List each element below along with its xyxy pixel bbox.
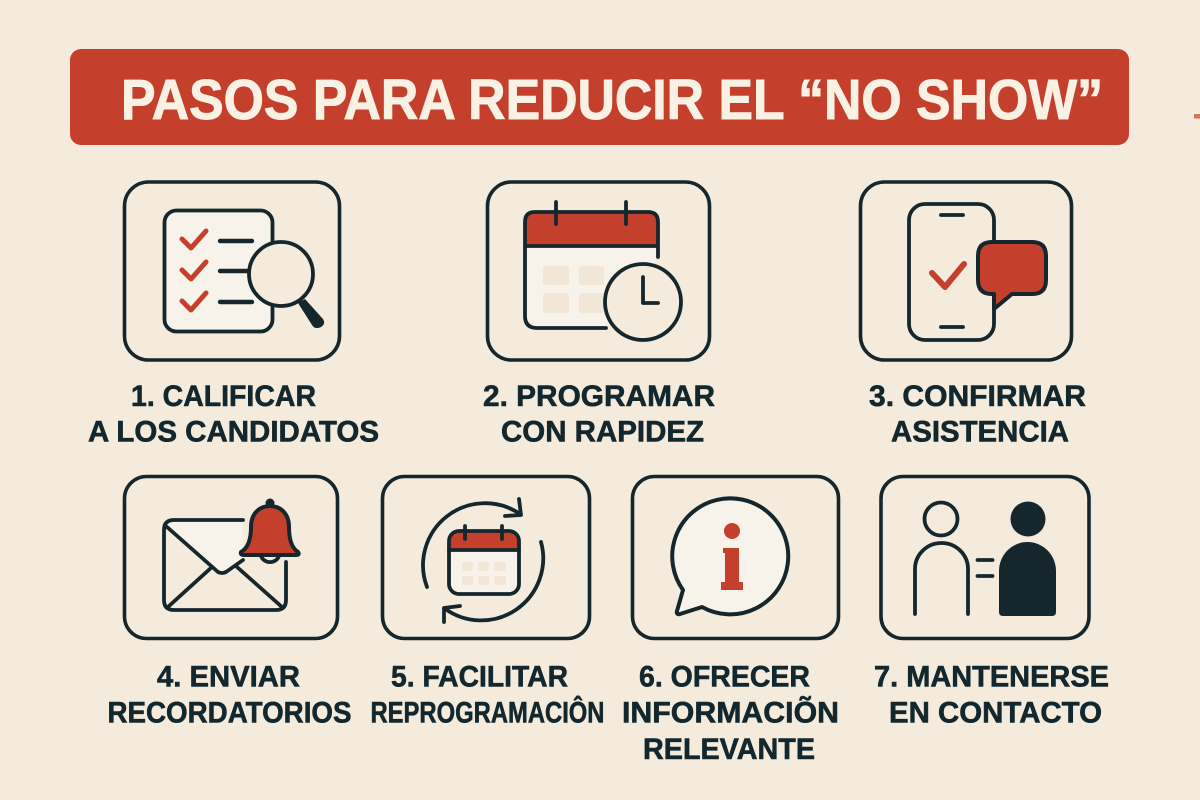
icon: two people connected <box>915 502 1056 616</box>
label: step 1 <box>88 380 379 448</box>
label: step 4: RECORDATORIOS <box>108 696 352 730</box>
icon frame 6 <box>632 476 838 638</box>
icon frame 7 <box>881 476 1089 638</box>
label: step 6 <box>622 660 839 766</box>
label: step 3: ASISTENCIA <box>891 416 1069 448</box>
label: step 6: 6. OFRECER <box>639 660 810 694</box>
title banner <box>70 49 1129 145</box>
panel: step 2 <box>483 182 715 448</box>
label: step 4 <box>108 660 352 730</box>
panel: step 4 <box>108 476 352 730</box>
panel: step 5 <box>370 476 604 730</box>
panel: step 7 <box>874 476 1109 730</box>
label: step 2: 2. PROGRAMAR <box>483 380 715 413</box>
icon: calendar with rotating arrows <box>423 499 543 622</box>
panel: step 6 <box>622 476 839 766</box>
label: step 6: INFORMACIÕN <box>622 696 839 730</box>
icon frame 2 <box>488 182 710 360</box>
label: step 2 <box>483 380 715 448</box>
panel: step 1 <box>88 182 379 448</box>
label: step 3: 3. CONFIRMAR <box>869 380 1086 413</box>
label: step 7: 7. MANTENERSE <box>874 660 1109 694</box>
label: step 3 <box>869 380 1086 448</box>
label: step 2: CON RAPIDEZ <box>501 416 704 448</box>
icon: checklist with magnifier <box>164 210 324 332</box>
label: step 4: 4. ENVIAR <box>157 660 300 694</box>
icon frame 1 <box>124 182 340 360</box>
label: step 7: EN CONTACTO <box>889 696 1102 730</box>
label: step 1: 1. CALIFICAR <box>131 380 316 413</box>
title banner: PASOS PARA REDUCIR EL “NO SHOW” <box>121 68 1103 132</box>
label: step 5 <box>370 660 604 730</box>
label: step 6: RELEVANTE <box>643 733 815 766</box>
label: step 5: 5. FACILITAR <box>391 660 568 694</box>
icon: information speech bubble <box>672 498 788 614</box>
icon: phone with speech bubble <box>909 204 1046 340</box>
icon frame 5 <box>382 476 590 638</box>
icon frame 3 <box>860 182 1072 360</box>
label: step 1: A LOS CANDIDATOS <box>88 416 379 448</box>
icon frame 4 <box>124 476 338 638</box>
icon: calendar with clock <box>525 202 681 340</box>
icon: envelope with bell <box>164 498 299 610</box>
label: step 7 <box>874 660 1109 730</box>
panel: step 3 <box>860 182 1086 448</box>
label: step 5: REPROGRAMACIÔN <box>370 696 604 730</box>
